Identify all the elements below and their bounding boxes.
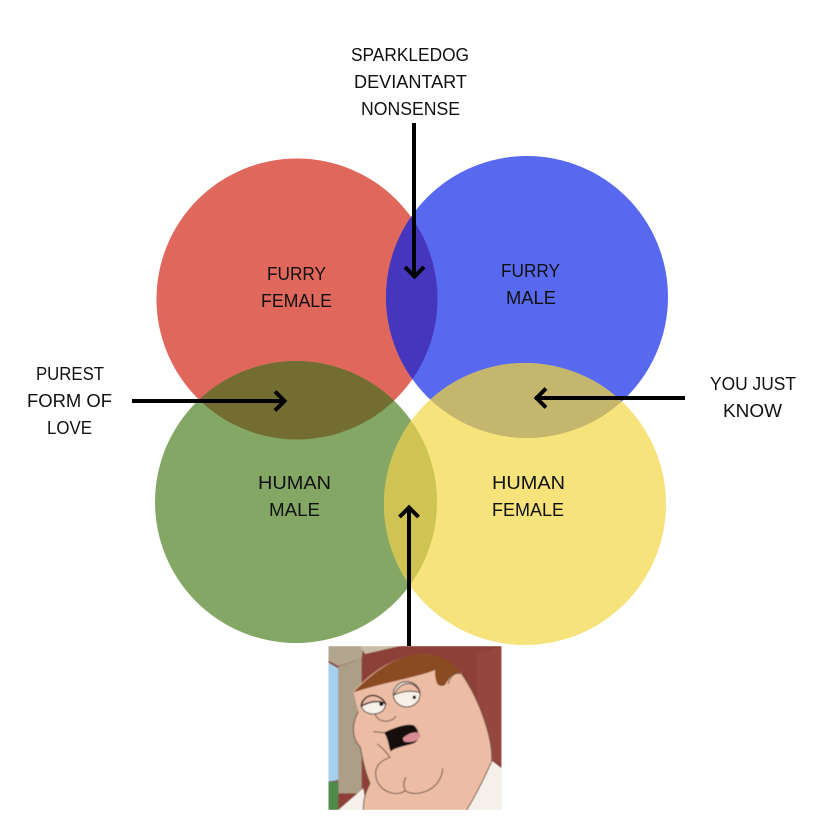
overlap: furry male and human female [430,363,622,438]
callout: purest form of love: FORM OF [27,390,112,411]
callout: purest form of love: LOVE [47,417,92,438]
label: human female [492,472,565,520]
callout: you just know: YOU JUST [710,373,796,394]
overlap: furry female and human male [200,361,394,440]
label: human female: HUMAN [492,472,565,493]
label: furry male: MALE [506,287,556,308]
label: human male [258,472,331,520]
callout: sparkledog deviantart nonsense: DEVIANTART [354,71,467,92]
label: human female: FEMALE [492,499,564,520]
callout: sparkledog deviantart nonsense [351,44,469,119]
label: furry female: FEMALE [261,290,332,311]
circle: furry female [156,158,438,440]
label: human male: HUMAN [258,472,331,493]
label: furry male [501,260,560,308]
arrow: up to human overlap [400,508,418,646]
label: human male: MALE [269,499,320,520]
callout: you just know: KNOW [723,400,783,421]
callout: sparkledog deviantart nonsense: SPARKLEDOG [351,44,469,65]
overlap: furry female and furry male [386,217,438,380]
label: furry female: FURRY [267,263,326,284]
overlap: human male and human female [384,420,437,584]
circle: human male [155,361,437,643]
label: furry male: FURRY [501,260,560,281]
callout: sparkledog deviantart nonsense: NONSENSE [361,98,460,119]
callout: you just know [710,373,796,421]
callout: purest form of love: PUREST [36,363,104,384]
arrow: right to purest form of love [132,392,285,410]
arrow: down to furry overlap [405,123,424,276]
circle: human female [384,363,666,645]
callout: purest form of love [27,363,112,438]
circle: furry male [386,156,668,438]
label: furry female [261,263,332,311]
image: cartoon man portrait [328,646,502,810]
arrow: left to you just know [535,388,685,408]
